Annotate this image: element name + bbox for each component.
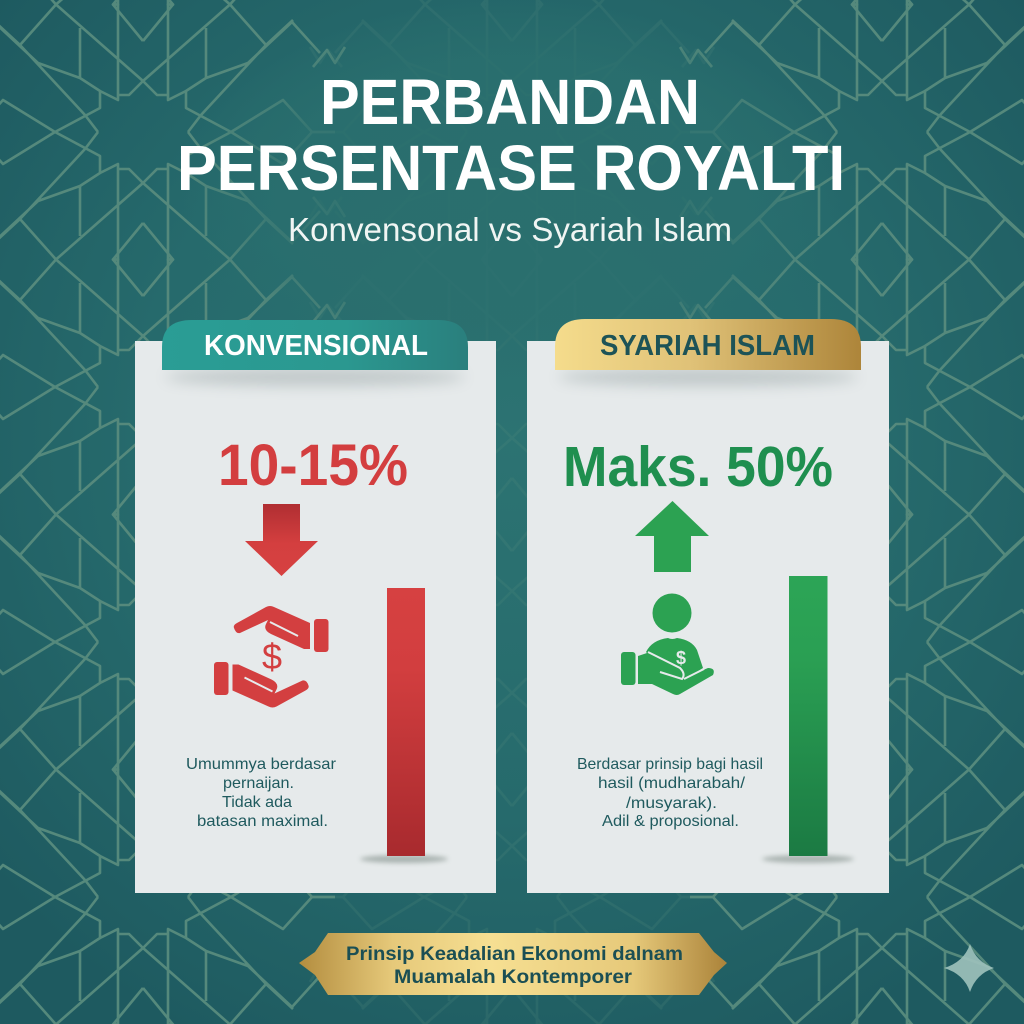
panel: syariah islam bbox=[527, 319, 889, 893]
icon: sparkle bbox=[944, 944, 994, 992]
bar: syariah bbox=[762, 576, 854, 863]
text: syariah description bbox=[577, 756, 763, 830]
subtitle: Konvensonal vs Syariah Islam bbox=[288, 211, 732, 248]
text: konvensional description: Tidak ada bbox=[222, 794, 292, 811]
footer ribbon: Muamalah Kontemporer bbox=[394, 966, 632, 988]
text: konvensional description: pernaijan. bbox=[223, 775, 294, 792]
icon: hands exchanging money bbox=[214, 606, 328, 708]
tab: konvensional bbox=[162, 320, 468, 370]
footer ribbon: Prinsip Keadalian Ekonomi dalnam bbox=[346, 943, 683, 965]
text: konvensional description: batasan maximal. bbox=[197, 813, 328, 830]
title: PERBANDAN bbox=[320, 66, 700, 138]
icon: up arrow bbox=[635, 501, 709, 572]
text: syariah description: Berdasar prinsip bagi hasil bbox=[577, 756, 763, 773]
footer ribbon bbox=[299, 933, 727, 995]
icon: person with hand and money bbox=[621, 594, 714, 695]
bar: konvensional bbox=[360, 588, 448, 863]
text: syariah description: /musyarak). bbox=[626, 795, 717, 812]
percentage: maks. 50%: Maks. 50% bbox=[563, 435, 833, 499]
percentage: 10-15%: 10-15% bbox=[218, 433, 408, 498]
title: PERSENTASE ROYALTI bbox=[177, 132, 845, 204]
text: konvensional description bbox=[186, 756, 337, 830]
title bbox=[177, 66, 845, 204]
tab: konvensional: KONVENSIONAL bbox=[204, 330, 428, 362]
tab: syariah islam: SYARIAH ISLAM bbox=[600, 330, 815, 362]
tab: syariah islam bbox=[555, 319, 861, 370]
icon: person with hand and money: $ bbox=[676, 648, 686, 668]
text: syariah description: Adil & proposional. bbox=[602, 813, 739, 830]
icon: hands exchanging money: $ bbox=[262, 636, 282, 677]
panel: konvensional bbox=[135, 320, 496, 893]
text: konvensional description: Umummya berdasar bbox=[186, 756, 337, 773]
icon: down arrow bbox=[245, 504, 318, 576]
text: syariah description: hasil (mudharabah/ bbox=[598, 775, 746, 792]
